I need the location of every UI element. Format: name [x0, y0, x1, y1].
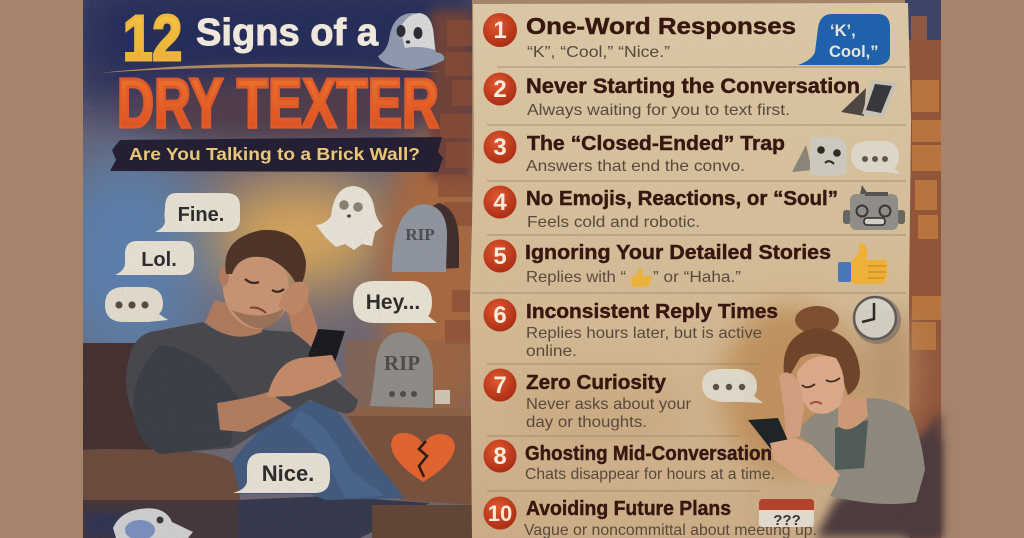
- icon: ghost and dots bubble: [792, 137, 901, 176]
- chat bubble: Nice.: [233, 453, 330, 493]
- head: [222, 257, 289, 329]
- title: 12: 12: [123, 2, 182, 74]
- title: DRY TEXTER: DRY TEXTER: [117, 64, 439, 142]
- item 5: 5: [493, 243, 507, 270]
- sofa back: [83, 343, 154, 450]
- item 5: Replies with “: [526, 269, 626, 286]
- subtitle banner: [110, 137, 443, 172]
- list dividers: [472, 67, 906, 491]
- icon: dots bubble: [702, 369, 763, 403]
- icon: ghost middle: [316, 186, 383, 250]
- item 4: 4: [493, 189, 507, 216]
- face: [797, 356, 844, 414]
- raised forearm: [288, 300, 318, 347]
- sofa arm cushion: [83, 449, 240, 505]
- item 8: [484, 440, 775, 483]
- texture on woman: [745, 310, 941, 538]
- decorative title rule: [100, 64, 442, 73]
- eyes and mouth: [245, 279, 284, 292]
- neck: [205, 300, 262, 337]
- phone: [308, 329, 345, 362]
- item 2: [484, 72, 860, 119]
- item 4: No Emojis, Reactions, or “Soul”: [526, 187, 838, 210]
- woman figure with dark table: [745, 306, 941, 538]
- brick pattern on left wall: [438, 20, 472, 344]
- item 1: [483, 13, 796, 61]
- item 6: Replies hours later, but is active: [526, 325, 762, 342]
- icon: RIP tombstone bottom: RIP: [384, 351, 420, 375]
- item 6: [484, 298, 778, 360]
- blanket: [238, 496, 430, 538]
- item 7: [484, 368, 692, 431]
- sweater: [795, 398, 925, 504]
- man figure: [126, 230, 405, 500]
- item 8: Ghosting Mid-Conversation: [525, 442, 772, 465]
- item 4: Feels cold and robotic.: [527, 214, 700, 231]
- item 6: online.: [526, 343, 577, 360]
- neck: [838, 395, 868, 429]
- icon: thumbs up: [838, 243, 887, 284]
- chat bubble: Hey...: Hey...: [366, 291, 420, 314]
- chat bubble: Fine.: Fine.: [178, 204, 224, 226]
- hand on head: [278, 282, 309, 316]
- chat bubble: Fine.: [155, 193, 240, 232]
- holding hand: [770, 438, 840, 486]
- icon: wall clock: [853, 296, 901, 344]
- icon: RIP tombstone top: [392, 203, 459, 272]
- hair: [795, 306, 839, 334]
- item 5: [484, 240, 831, 287]
- forearm to phone: [217, 392, 292, 432]
- item 1: One-Word Responses: [526, 13, 796, 39]
- item 6: Inconsistent Reply Times: [526, 300, 778, 323]
- chat bubble: Lol.: [115, 241, 194, 275]
- icon: calendar: [759, 499, 814, 529]
- item 1: 1: [493, 17, 507, 44]
- icon: broken heart: [391, 433, 455, 482]
- icon: faded chat ghost bottom: [113, 508, 193, 538]
- item 1: “K”, “Cool,” “Nice.”: [527, 44, 670, 61]
- item 5: ” or “Haha.”: [653, 269, 741, 286]
- title: Signs of a: Signs of a: [196, 12, 379, 54]
- phone: [748, 418, 793, 462]
- item 7: Never asks about your: [526, 396, 692, 413]
- panel: left scene background: [83, 0, 472, 538]
- icon: phone lying down: [841, 80, 897, 118]
- texture overlay on left scene: [83, 0, 472, 538]
- icon: RIP tombstone top: RIP: [405, 225, 435, 244]
- sofa ledge at right: [345, 340, 472, 412]
- icon: blue chat bubble: ‘K’,: [830, 22, 856, 40]
- item 3: 3: [493, 134, 507, 161]
- chat bubble: Hey...: [353, 281, 437, 323]
- raised hand and arm: [779, 372, 804, 440]
- item 10: Avoiding Future Plans: [526, 497, 731, 520]
- item 8: Chats disappear for hours at a time.: [525, 466, 775, 483]
- chat bubble: dots: [105, 287, 168, 322]
- hair: [225, 230, 306, 288]
- item 6: 6: [493, 302, 507, 329]
- sweater: [126, 322, 358, 454]
- icon: blue chat bubble: Cool,”: [829, 43, 878, 61]
- chat bubble: Lol.: Lol.: [141, 249, 177, 271]
- item 2: Always waiting for you to text first.: [527, 102, 790, 119]
- icon: robot: [843, 185, 905, 230]
- item 5: Ignoring Your Detailed Stories: [525, 241, 831, 264]
- item 2: 2: [493, 76, 507, 103]
- subtitle banner: Are You Talking to a Brick Wall?: [129, 144, 420, 164]
- stubble: [232, 308, 284, 328]
- item 3: The “Closed-Ended” Trap: [527, 132, 785, 155]
- hand on phone: [267, 355, 342, 397]
- panel: paper list: [470, 3, 920, 538]
- icon: calendar: ???: [773, 512, 801, 529]
- icon: ghost top: [378, 13, 444, 70]
- item 8: 8: [493, 443, 507, 470]
- item 3: [484, 130, 785, 175]
- item 7: 7: [493, 372, 507, 399]
- jeans: [232, 401, 405, 500]
- icon: blue chat bubble: [798, 14, 890, 65]
- item 7: Zero Curiosity: [526, 371, 667, 394]
- item 10: [484, 496, 817, 538]
- item 10: 10: [488, 501, 512, 526]
- item 4: [484, 186, 838, 231]
- icon: RIP tombstone bottom: [370, 332, 450, 408]
- panel: right brick wall: [905, 0, 941, 538]
- item 2: Never Starting the Conversation: [526, 75, 860, 98]
- item 7: day or thoughts.: [526, 414, 647, 431]
- item 3: Answers that end the convo.: [526, 158, 745, 175]
- chat bubble: Nice.: Nice.: [262, 461, 314, 486]
